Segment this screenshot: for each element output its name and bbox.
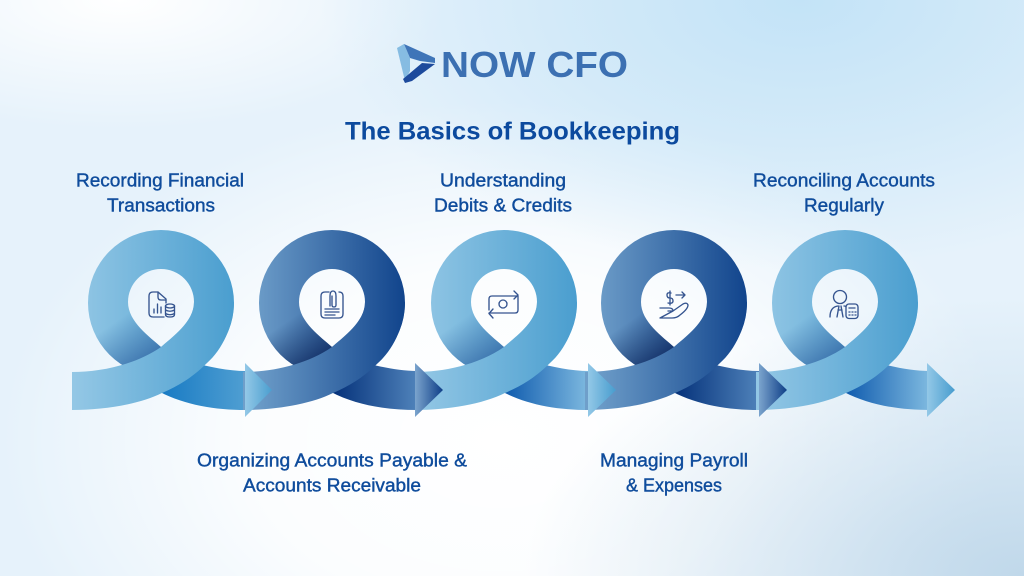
label: recording financial transactions: Recording Financial xyxy=(76,170,244,190)
loop 5 ribbon xyxy=(756,230,930,410)
icon: person with calculator xyxy=(830,290,858,318)
logo mark xyxy=(397,44,435,83)
label: reconciling accounts regularly: Reconciling Accounts xyxy=(753,170,935,190)
arrowhead 2 xyxy=(415,363,443,417)
label: understanding debits and credits: Understanding xyxy=(440,170,566,190)
logo wordmark: NOW CFO xyxy=(441,44,628,85)
label: managing payroll and expenses: & Expenses xyxy=(626,476,722,496)
label: reconciling accounts regularly: Regularly xyxy=(804,196,884,216)
loop 3 ribbon xyxy=(415,230,589,410)
label: recording financial transactions xyxy=(76,170,244,216)
loop 4 ribbon xyxy=(585,230,759,410)
arrowhead 5 xyxy=(927,363,955,417)
label: managing payroll and expenses: Managing Payroll xyxy=(600,450,748,470)
icon: document with paper clip xyxy=(321,291,343,318)
icon: document with chart and database xyxy=(149,292,174,317)
arrowhead 1 xyxy=(245,363,272,417)
label: organizing accounts payable and receivable: Accounts Receivable xyxy=(243,476,421,496)
icon: money exchange xyxy=(489,291,518,318)
logo xyxy=(397,44,628,85)
label: reconciling accounts regularly xyxy=(753,170,935,216)
icon: hand with dollar and arrow xyxy=(660,291,688,318)
arrowhead 3 xyxy=(588,363,616,417)
label: understanding debits and credits xyxy=(434,170,572,216)
arrowhead 4 xyxy=(759,363,787,417)
label: managing payroll and expenses xyxy=(600,450,748,496)
label: recording financial transactions: Transactions xyxy=(107,196,215,216)
loop 1 ribbon xyxy=(72,230,246,410)
label: organizing accounts payable and receivable xyxy=(197,450,467,496)
title: The Basics of Bookkeeping xyxy=(345,118,680,146)
label: understanding debits and credits: Debits & Credits xyxy=(434,196,572,216)
label: organizing accounts payable and receivable: Organizing Accounts Payable & xyxy=(197,450,467,470)
loop 2 ribbon xyxy=(243,230,417,410)
